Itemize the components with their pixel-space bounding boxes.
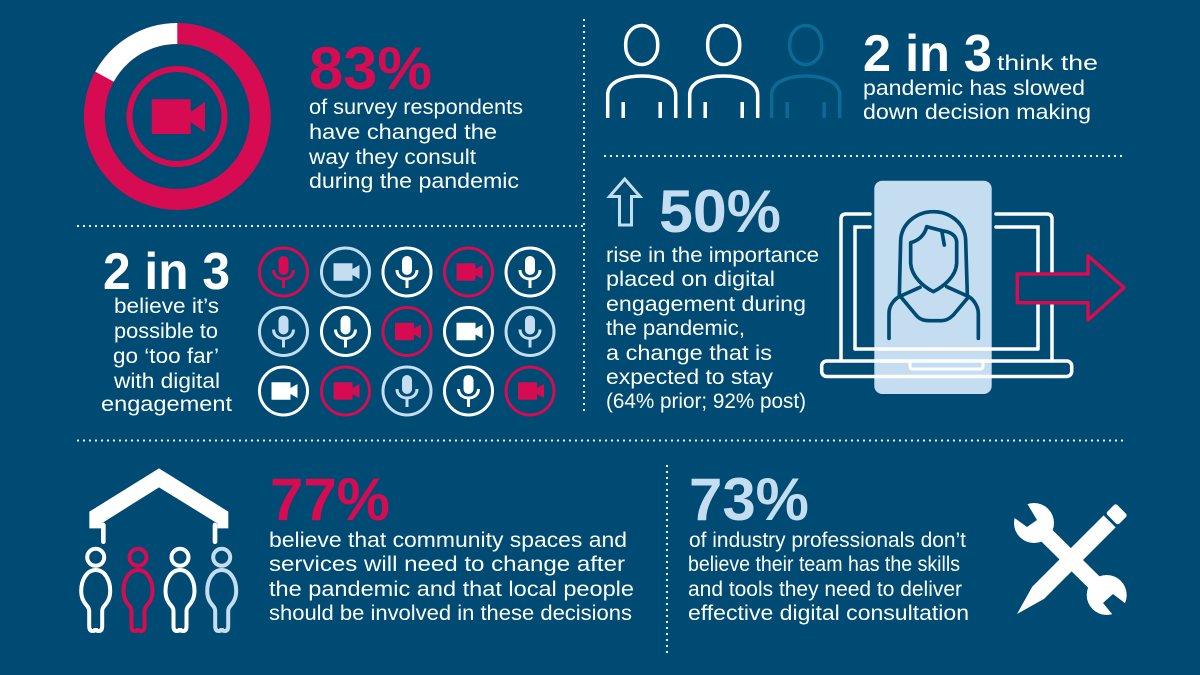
stat: 77%: 77% [270, 466, 390, 533]
icon grid: microphones and cameras [260, 248, 554, 415]
text: slowed decision making: down decision making [863, 101, 1091, 124]
text: 73% description: believe their team has the skills [688, 553, 960, 576]
text: 50% description [606, 244, 819, 413]
text: 77% description: services will need to change after [269, 553, 625, 576]
text: 50% description: placed on digital [606, 268, 775, 291]
panel: 2 in 3 too far [101, 243, 554, 416]
text: 50% description: (64% prior; 92% post) [606, 390, 806, 413]
text: 50% description: expected to stay [606, 366, 774, 389]
text: 83% description: during the pandemic [309, 170, 519, 193]
text: too far description [101, 295, 232, 416]
text: 83% description: way they consult [308, 146, 476, 169]
text: 50% description: the pandemic, [606, 317, 745, 340]
text: too far description: possible to [114, 320, 218, 343]
text: 50% description: rise in the importance [606, 244, 819, 267]
panel: 77% community spaces [81, 466, 634, 631]
text: 73% description: effective digital consultation [688, 602, 969, 625]
text: too far description: go ‘too far’ [113, 345, 219, 368]
icon: crossed wrench and pencil [1009, 500, 1134, 620]
text: 77% description [269, 529, 634, 625]
icon: video camera in ring [130, 69, 224, 164]
text: 50% description: a change that is [606, 342, 772, 365]
panel: 73% skills and tools [688, 466, 1134, 625]
stat: 2 in 3: 2 in 3 [863, 25, 992, 83]
text: 77% description: believe that community spaces and [269, 529, 627, 552]
text: too far description: believe it’s [114, 295, 219, 318]
donut chart: 83% [94, 34, 260, 200]
text: slowed decision making: pandemic has slowed [863, 77, 1085, 100]
stat: 83%: 83% [309, 35, 432, 102]
text: slowed decision making [863, 52, 1098, 124]
text: 73% description: of industry professionals don’t [689, 529, 966, 552]
text: 73% description [688, 529, 969, 625]
panel: 83% changed consultation [94, 34, 523, 200]
panel: 50% rise in digital engagement [606, 178, 1124, 413]
icon: three people, two highlighted [608, 26, 840, 118]
text: 83% description: of survey respondents [309, 96, 523, 119]
text: too far description: engagement [101, 393, 232, 416]
text: 77% description: the pandemic and that local people [269, 578, 634, 601]
stat: 50%: 50% [659, 178, 781, 245]
text: 83% description [308, 96, 523, 193]
stat: 73%: 73% [689, 466, 809, 533]
illustration: laptop with phone and person [822, 181, 1072, 394]
icon: up arrow [610, 179, 640, 225]
text: slowed decision making: think the [997, 52, 1098, 75]
text: 50% description: engagement during [606, 293, 806, 316]
text: 77% description: should be involved in these decisions [269, 602, 632, 625]
text: 73% description: and tools they need to deliver [688, 578, 962, 601]
text: 83% description: have changed the [309, 121, 497, 144]
arrow: right-pointing pink outline [1017, 256, 1124, 320]
icon: roof over four people [81, 468, 236, 631]
panel: 2 in 3 slowed decision making [608, 25, 1098, 124]
stat: 2 in 3: 2 in 3 [103, 243, 230, 301]
text: too far description: with digital [113, 370, 220, 393]
